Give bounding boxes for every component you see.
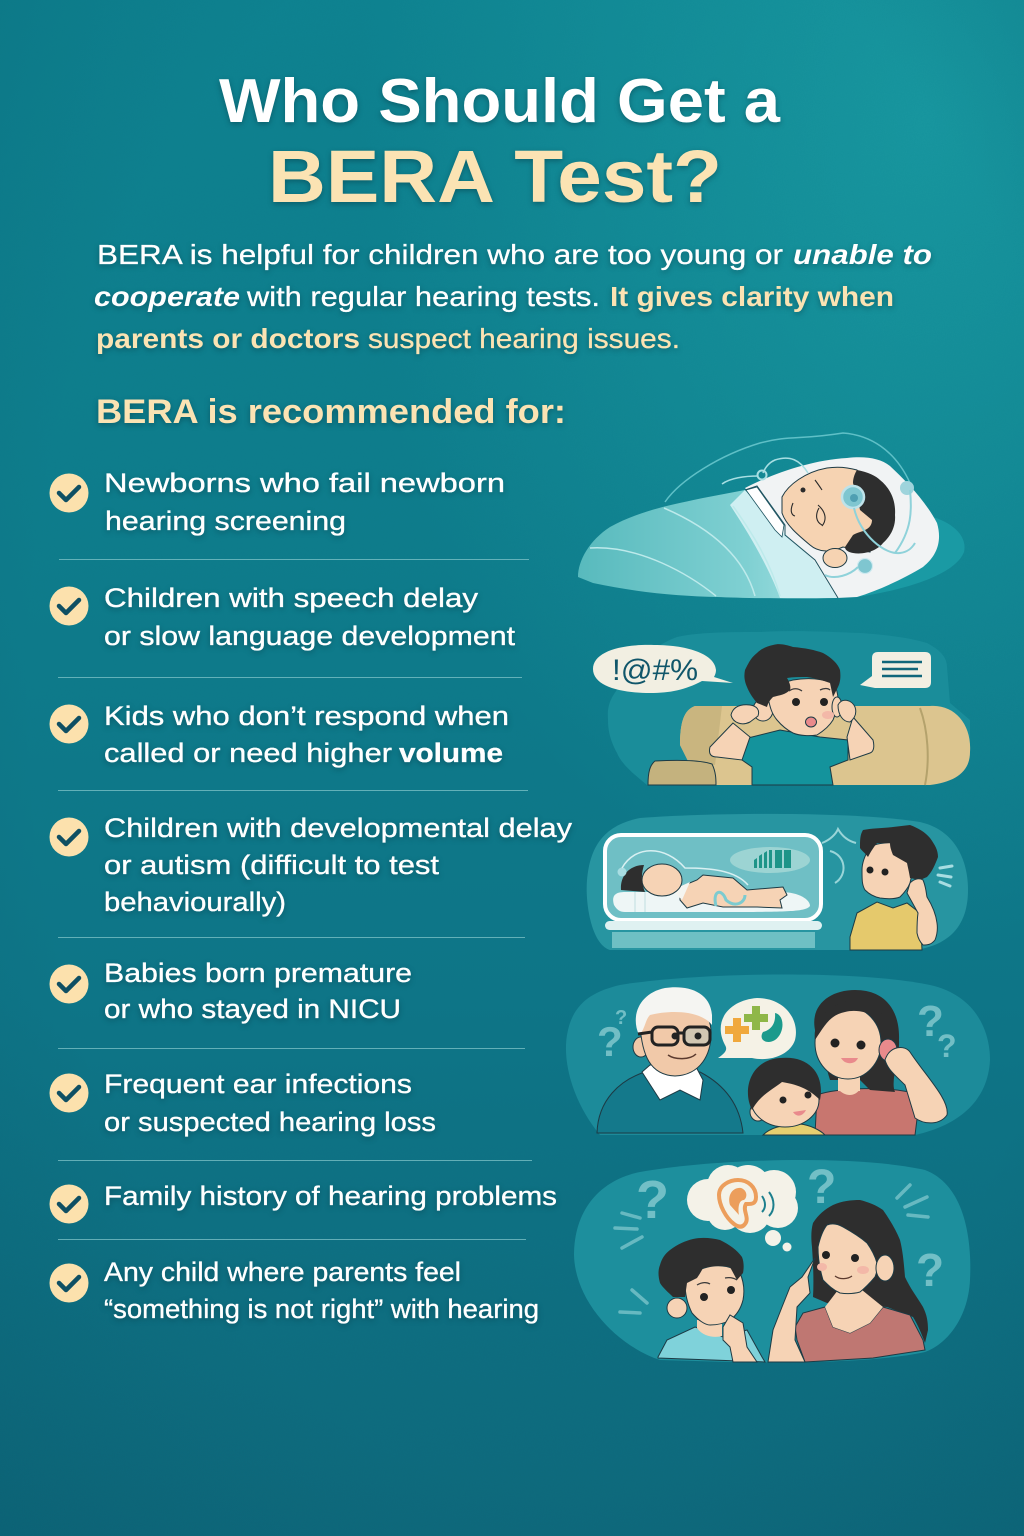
list item: newborns: Newborns who fail newborn [104,468,505,498]
title: Who Should Get a [219,67,781,136]
list item: developmental delay: behaviourally) [104,887,286,917]
boy [850,825,952,950]
mother [814,990,947,1135]
list item: speech delay: or slow language development [104,621,516,651]
illustration: mother and son thinking about hearing [574,1160,970,1362]
list item: developmental delay: Children with developmental delay [104,813,573,843]
list item: family history [50,1181,557,1224]
list item: parental concern: Any child where parents feel [104,1257,461,1287]
illustration: baby in incubator and boy touching ear [587,814,968,950]
list item: no response: Kids who don’t respond when [104,701,509,731]
list item: premature: Babies born premature [104,958,412,988]
grandfather [597,987,743,1133]
intro paragraph: with regular hearing tests. [246,281,600,312]
list item: speech delay: Children with speech delay [104,583,479,613]
question marks: ? [937,1028,957,1064]
list item: parental concern: “something is not right” with hearing [104,1294,539,1324]
list item: parental concern [50,1257,539,1324]
dividers [58,560,532,1240]
speech bubble: symbols [593,645,733,693]
list item: speech delay [50,583,516,651]
question marks: ? [917,997,944,1046]
question marks: ? [615,1007,627,1029]
intro paragraph: BERA is helpful for children who are too young or [97,239,783,270]
list item: newborns [50,468,505,536]
boy [709,644,874,785]
speech bubble: symbols: !@#% [612,654,698,687]
intro paragraph: unable to [793,239,932,270]
list item: developmental delay: or autism (difficult to test [104,850,440,880]
list item: no response: volume [399,738,503,768]
list item: family history: Family history of hearing problems [104,1181,557,1211]
list item: premature: or who stayed in NICU [104,994,401,1024]
list item: no response: called or need higher [104,738,392,768]
motion dashes [615,1185,928,1313]
list item: ear infections: or suspected hearing loss [104,1107,436,1137]
son [658,1238,765,1362]
question marks [636,1161,944,1296]
incubator [605,835,822,948]
title: BERA Test? [268,135,722,218]
intro paragraph: cooperate [94,281,240,312]
section heading: BERA is recommended for: [96,393,566,431]
mother [768,1200,928,1362]
question marks: ? [636,1170,669,1230]
illustration: boy covering ears on sofa [593,631,970,785]
list item: premature [50,958,412,1024]
child [748,1058,825,1135]
list item: newborns: hearing screening [105,506,346,536]
illustration: sleeping newborn with electrodes [578,433,965,598]
question marks: ? [807,1161,836,1214]
thought bubble [718,998,796,1059]
list item: no response [50,701,509,768]
intro paragraph [94,239,932,354]
thought cloud with ear [687,1165,798,1252]
list item: ear infections [50,1069,436,1137]
sound waves [822,829,856,883]
question marks: ? [916,1244,944,1296]
question marks [597,997,957,1065]
illustration: grandfather, mother and child [566,974,990,1135]
intro paragraph: It gives clarity when [610,281,894,312]
list item: developmental delay [50,813,573,917]
question marks: ? [597,1018,623,1065]
intro paragraph: suspect hearing issues. [368,323,680,354]
speech bubble: lines [860,652,931,688]
title [219,67,781,218]
intro paragraph: parents or doctors [96,323,360,354]
list item: ear infections: Frequent ear infections [104,1069,412,1099]
